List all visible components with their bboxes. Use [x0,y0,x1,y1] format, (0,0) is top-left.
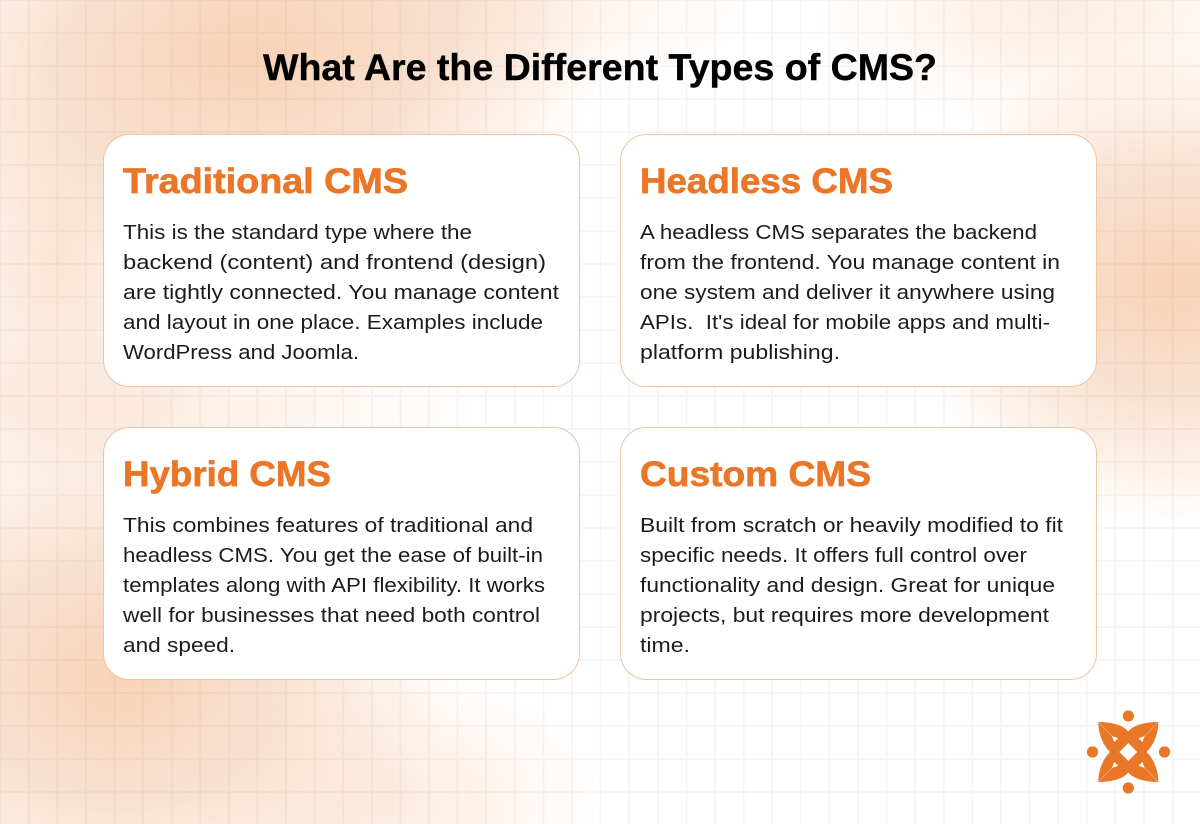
title: What Are the Different Types of CMS? [263,47,937,88]
text block: Custom CMS description: functionality and design. Great for unique [640,574,1055,597]
text block: Headless CMS description [640,221,1060,364]
text block: Custom CMS description: projects, but requires more development [640,604,1049,627]
icon: logo [1087,710,1170,794]
text block: Hybrid CMS description: templates along with API flexibility. It works [123,574,545,597]
text block: Headless CMS description: one system and deliver it anywhere using [640,281,1055,304]
text block: Hybrid CMS description: well for businesses that need both control [122,604,540,627]
text block: Custom CMS description: time. [640,634,690,657]
text block: Headless CMS description: APIs. It's ideal for mobile apps and multi- [640,311,1050,334]
heading: Hybrid CMS: Hybrid CMS [123,455,331,494]
text block: Traditional CMS description: and layout in one place. Examples include [123,311,543,334]
text block: Hybrid CMS description: and speed. [123,634,235,657]
text block: Custom CMS description [640,514,1063,657]
text block: Custom CMS description: specific needs. It offers full control over [640,544,1027,567]
text block: Headless CMS description: from the frontend. You manage content in [640,251,1060,274]
text block: Hybrid CMS description: This combines features of traditional and [123,514,533,537]
heading: Traditional CMS: Traditional CMS [123,162,408,201]
text block: Custom CMS description: Built from scratch or heavily modified to fit [640,514,1063,537]
text block: Traditional CMS description: are tightly connected. You manage content [123,281,559,304]
heading: Custom CMS: Custom CMS [640,455,871,494]
text block: Headless CMS description: A headless CMS separates the backend [640,221,1037,244]
panel: Hybrid CMS [104,428,580,680]
text block: Traditional CMS description: WordPress and Joomla. [123,341,359,364]
text block: Traditional CMS description [123,221,559,364]
text block: Hybrid CMS description: headless CMS. You get the ease of built-in [123,544,543,567]
panel: Headless CMS [620,134,1096,386]
panel: Custom CMS [620,428,1096,680]
heading: Headless CMS: Headless CMS [640,162,893,201]
text block: Traditional CMS description: This is the standard type where the [123,221,472,244]
text block: Headless CMS description: platform publishing. [640,341,840,364]
text block: Hybrid CMS description [122,514,545,657]
panel: Traditional CMS [104,134,580,386]
text block: Traditional CMS description: backend (content) and frontend (design) [123,251,546,274]
